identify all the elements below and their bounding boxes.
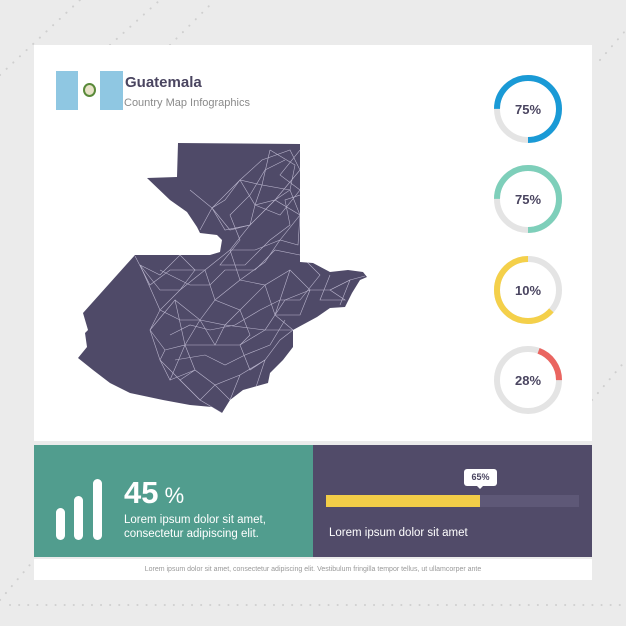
stat: 45%: 45 % xyxy=(124,475,184,510)
main card xyxy=(34,45,592,441)
progress bar xyxy=(326,495,579,507)
map of Guatemala xyxy=(78,143,367,413)
footer text xyxy=(34,559,592,580)
footer text: Lorem ipsum dolor sit amet, consectetur adipiscing elit. Vestibulum fringilla tempor tellus, ut ullamcorper ante xyxy=(145,566,481,573)
donut: 75% blue xyxy=(494,75,562,143)
title: Guatemala xyxy=(125,74,202,91)
stat text xyxy=(124,514,266,540)
callout: 65% xyxy=(464,469,497,486)
donut: 10% yellow: 10% xyxy=(515,283,541,298)
donut: 75% blue: 75% xyxy=(515,102,541,117)
panel: purple progress xyxy=(313,445,592,557)
subtitle: Country Map Infographics xyxy=(124,97,250,109)
donut: 75% teal xyxy=(494,165,562,233)
donut: 75% teal: 75% xyxy=(515,192,541,207)
stat text: Lorem ipsum dolor sit amet, xyxy=(124,514,266,526)
flag icon xyxy=(56,71,123,110)
icon: bar chart xyxy=(56,479,102,540)
callout: 65%: 65% xyxy=(471,472,490,482)
stat text: consectetur adipiscing elit. xyxy=(124,528,259,540)
donut: 28% red xyxy=(494,346,562,414)
donut: 28% red: 28% xyxy=(515,373,541,388)
panel: green stat xyxy=(34,445,313,557)
progress text: Lorem ipsum dolor sit amet xyxy=(329,527,468,539)
donut: 10% yellow xyxy=(494,256,562,324)
